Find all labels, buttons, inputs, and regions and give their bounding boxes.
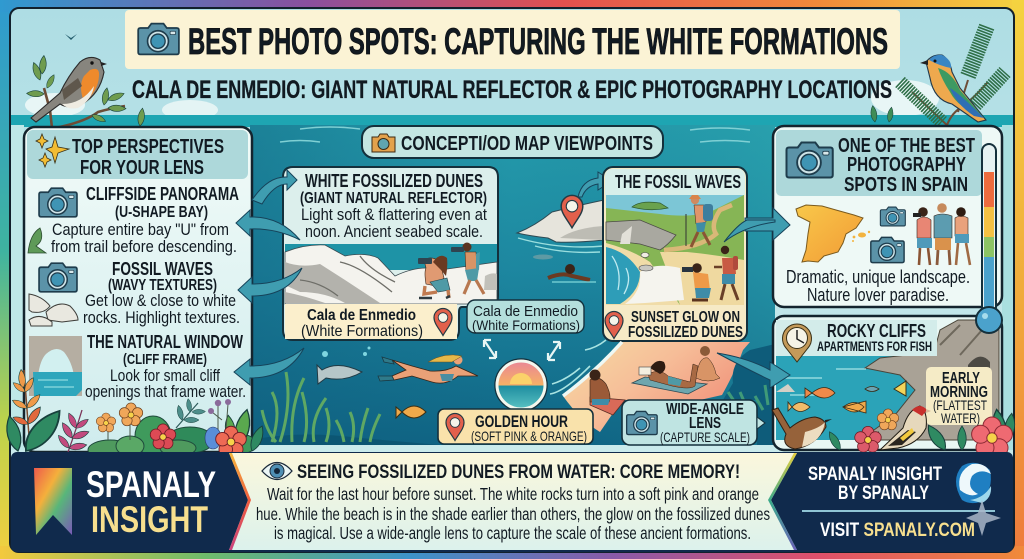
- label: golden hour: GOLDEN HOUR: [475, 412, 568, 431]
- text block: Light soft & flattering even at: [301, 205, 487, 224]
- item: cliffside panorama: CLIFFSIDE PANORAMA: [86, 184, 239, 204]
- icon: title camera: [138, 24, 179, 54]
- location label: Cala de Enmedio: [307, 307, 416, 324]
- icon: wave logo: [956, 463, 991, 503]
- label: wide-angle lens: (CAPTURE SCALE): [660, 429, 750, 445]
- icon: small cameras: [871, 207, 905, 263]
- illustration: bluebird on pine branch: [870, 26, 1005, 128]
- title banner: [125, 10, 900, 69]
- illustration: fish and snorkeller: [317, 346, 478, 418]
- icon: yellow pointer: [894, 381, 906, 396]
- text block: (GIANT NATURAL REFLECTOR): [300, 190, 487, 207]
- section heading: concept map viewpoints: [362, 126, 663, 158]
- icon: double arrows: [484, 340, 560, 360]
- text block: Nature lover paradise.: [807, 285, 949, 305]
- panel: top perspectives: [24, 127, 252, 452]
- header: rocky cliffs: APARTMENTS FOR FISH: [817, 339, 932, 354]
- item: natural window: openings that frame water.: [85, 382, 246, 401]
- callout: early morning: [926, 367, 992, 426]
- heading: TOP PERSPECTIVES: [72, 136, 224, 158]
- visit link: VISIT SPANALY.COM: [820, 520, 975, 541]
- heading: ONE OF THE BEST: [838, 135, 975, 157]
- location label: [301, 307, 423, 340]
- callout: early morning: (FLATTEST: [933, 397, 987, 413]
- callout: early morning: WATER): [941, 410, 980, 426]
- illustration: foliage and birds right: [772, 406, 1016, 457]
- panel: one of the best: [773, 126, 1002, 307]
- heading: THE FOSSIL WAVES: [615, 172, 741, 192]
- illustration: beach: [550, 340, 775, 445]
- item: cliffside panorama: from trail before descending.: [51, 237, 237, 256]
- picture: coastal trail with hikers: [606, 195, 744, 305]
- icon: camera: [786, 142, 833, 178]
- caption: SUNSET GLOW ON: [631, 309, 740, 326]
- caption: FOSSILIZED DUNES: [628, 324, 743, 341]
- logo: spanaly insight: INSIGHT: [91, 499, 208, 540]
- body text: is magical. Use a wide-angle lens to capture the scale of these ancient formations.: [274, 523, 751, 543]
- item: fossil waves: [29, 259, 240, 327]
- label: wide-angle lens: WIDE-ANGLE: [666, 401, 744, 418]
- illustration: robin on branch: [27, 55, 146, 128]
- illustration: swimmer: [548, 264, 596, 282]
- icon: location pin: [605, 312, 623, 338]
- bird: wren: [772, 408, 832, 449]
- icon: rainbow bookmark: [34, 468, 72, 535]
- arrows: teal connectors: [234, 170, 790, 388]
- logo: spanaly insight: [34, 464, 216, 540]
- map: spain: [796, 205, 870, 262]
- item: cliffside panorama: [28, 184, 239, 256]
- label: golden hour: [438, 409, 593, 444]
- heading: [838, 135, 975, 196]
- item: cliffside panorama: (U-SHAPE BAY): [115, 204, 208, 221]
- body text: hue. While the beach is in the shade earlier than others, the glow on the fossilized dunes: [256, 504, 770, 524]
- figures: three photographers: [913, 203, 970, 265]
- item: fossil waves: rocks. Highlight textures.: [83, 308, 240, 327]
- bird: goldfinch: [880, 406, 931, 450]
- dark rock with seaweed: [723, 344, 775, 445]
- figures: sunbathers: [590, 346, 720, 415]
- item: cliffside panorama: Capture entire bay "U" from: [52, 220, 229, 239]
- item: fossil waves: FOSSIL WAVES: [112, 259, 213, 279]
- body text: [256, 484, 770, 543]
- callout: early morning: MORNING: [930, 384, 988, 401]
- heading: FOR YOUR LENS: [80, 157, 204, 179]
- panel: the fossil waves: [603, 167, 747, 341]
- label: wide-angle lens: LENS: [689, 415, 721, 432]
- item: fossil waves: Get low & close to white: [85, 291, 236, 310]
- panel: white fossilized dunes: [283, 167, 498, 340]
- icon: eye: [262, 462, 292, 480]
- illustration: foliage bottom left: [3, 369, 266, 460]
- picture: dunes and photographers: [285, 242, 497, 304]
- icon: clock pin: [782, 324, 812, 362]
- icon: small distant bird: [65, 34, 77, 40]
- brand block: [802, 463, 1001, 541]
- illustration: golden hour sunset: [495, 359, 547, 411]
- item: fossil waves: (WAVY TEXTURES): [108, 277, 217, 294]
- item: natural window: [29, 332, 246, 401]
- label: cala de enmedio: [467, 300, 584, 333]
- brand block: SPANALY INSIGHT: [808, 464, 942, 485]
- cliff: [860, 320, 999, 440]
- thermometer: [976, 144, 1002, 333]
- logo: spanaly insight: SPANALY: [86, 464, 216, 505]
- label: wide-angle lens: [622, 400, 765, 445]
- map: rock with pin: [517, 172, 612, 260]
- text block: noon. Ancient seabed scale.: [305, 222, 483, 241]
- heading: [72, 136, 224, 179]
- text block: [786, 267, 970, 305]
- body text: Wait for the last hour before sunset. The white rocks turn into a soft pink and orange: [267, 484, 759, 504]
- icon: location pin: [434, 308, 452, 336]
- label: golden hour: (SOFT PINK & ORANGE): [471, 428, 587, 444]
- heading text: CONCEPTI/OD MAP VIEWPOINTS: [401, 133, 653, 155]
- text block: Dramatic, unique landscape.: [786, 267, 970, 287]
- figure: snorkeller: [378, 355, 478, 383]
- header: rocky cliffs: ROCKY CLIFFS: [827, 321, 926, 341]
- item: natural window: Look for small cliff: [110, 366, 220, 385]
- item: natural window: THE NATURAL WINDOW: [87, 332, 243, 352]
- text block: [300, 171, 487, 241]
- panel: rocky cliffs: [773, 316, 1002, 450]
- location label: (White Formations): [301, 323, 423, 340]
- illustration: reef fish: [788, 386, 879, 413]
- icon: sparkle: [966, 500, 1001, 536]
- caption: [628, 309, 743, 341]
- figures: photographers: [418, 242, 484, 298]
- footer band: [11, 452, 1013, 552]
- header: rocky cliffs: [776, 320, 937, 356]
- heading: SPOTS IN SPAIN: [844, 174, 968, 196]
- figures: hikers: [682, 195, 738, 300]
- heading: SEEING FOSSILIZED DUNES FROM WATER: CORE MEMORY!: [297, 462, 740, 483]
- item: natural window: (CLIFF FRAME): [123, 351, 207, 368]
- icon: orange camera: [372, 134, 395, 152]
- label: cala de enmedio: Cala de Enmedio: [473, 303, 578, 320]
- callout: early morning: EARLY: [942, 370, 980, 387]
- illustration: seagrass: [262, 372, 380, 442]
- brand block: BY SPANALY: [838, 483, 929, 504]
- text block: WHITE FOSSILIZED DUNES: [305, 171, 483, 191]
- callout: seeing fossilized dunes: [229, 453, 797, 550]
- icon: sparkles: [36, 134, 69, 167]
- label: cala de enmedio: (White Formations): [472, 317, 580, 333]
- heading: PHOTOGRAPHY: [847, 154, 966, 176]
